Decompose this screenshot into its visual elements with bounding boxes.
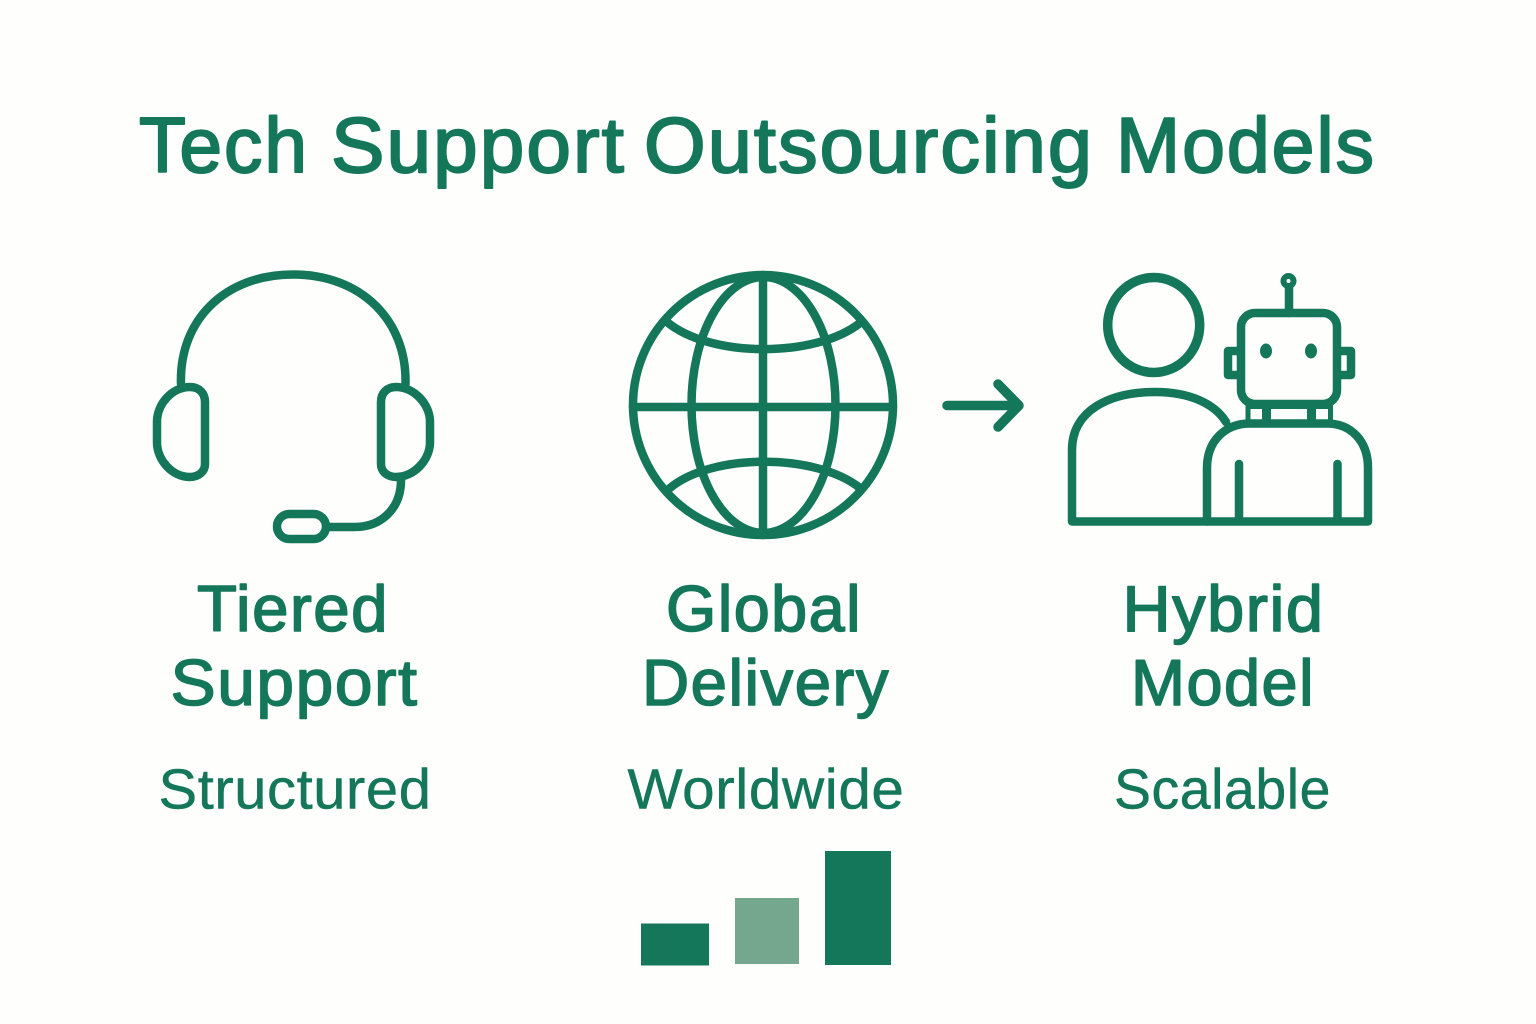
- title: Outsourcing: [644, 101, 1094, 189]
- person body: [1072, 392, 1226, 522]
- icon: person and robot: [1072, 276, 1368, 522]
- heading: global delivery: Delivery: [642, 646, 890, 719]
- heading: hybrid model: Model: [1131, 646, 1315, 719]
- title: [139, 101, 1376, 189]
- robot antenna: [1285, 288, 1293, 313]
- heading: tiered support: Tiered: [197, 572, 389, 645]
- icon: globe: [633, 275, 893, 535]
- heading: hybrid model: [1122, 572, 1324, 719]
- person head: [1108, 278, 1200, 372]
- robot left ear: [1228, 351, 1239, 375]
- robot head: [1241, 313, 1337, 404]
- heading: tiered support: [170, 572, 418, 719]
- label: scalable: Scalable: [1114, 758, 1331, 822]
- robot antenna tip: [1284, 276, 1294, 286]
- label: worldwide: Worldwide: [628, 758, 904, 822]
- icon: headset: [157, 274, 430, 539]
- heading: global delivery: [642, 572, 890, 719]
- title: Models: [1116, 101, 1376, 189]
- arrow: [947, 384, 1019, 427]
- title: Support: [331, 101, 626, 189]
- robot neck: [1246, 404, 1333, 421]
- robot left arm: [1235, 464, 1243, 520]
- robot right arm: [1333, 464, 1342, 520]
- robot body: [1207, 424, 1368, 522]
- robot eyes: [1260, 344, 1317, 358]
- robot right ear: [1339, 351, 1351, 375]
- heading: tiered support: Support: [170, 646, 418, 719]
- heading: global delivery: Global: [666, 572, 862, 645]
- heading: hybrid model: Hybrid: [1122, 572, 1324, 645]
- label: structured: Structured: [158, 758, 432, 822]
- bar chart: [641, 851, 891, 966]
- title: Tech: [139, 101, 309, 189]
